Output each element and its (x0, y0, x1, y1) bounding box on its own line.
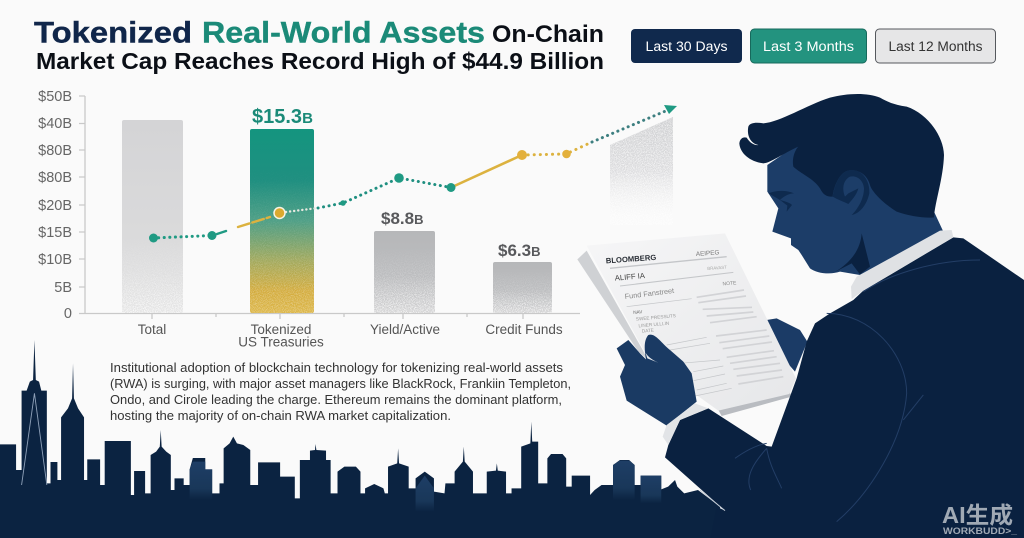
button: Last 30 Days: Last 30 Days (646, 39, 728, 54)
neck shadow (832, 233, 870, 274)
title: Market Cap Reaches Record High of $44.9 Billion (36, 48, 604, 74)
category labels: Credit Funds (485, 322, 563, 337)
document (577, 233, 796, 416)
button: Last 3 Months: Last 3 Months (763, 39, 854, 54)
value label: $8.8B: $8.8B (381, 209, 423, 228)
document text: AEIPEG (696, 249, 720, 258)
y axis labels: $50B (38, 89, 72, 105)
body, hands and document (577, 233, 1024, 538)
watermark: AI生成 (942, 502, 1013, 528)
bar: Tokenized US Treasuries (250, 129, 314, 313)
y axis (38, 89, 85, 322)
document text: NOTE (722, 280, 737, 287)
document text (606, 249, 737, 334)
shirt collar (851, 230, 953, 299)
bar: Credit Funds (493, 262, 552, 313)
y axis labels: $40B (38, 116, 72, 132)
hair (739, 94, 944, 218)
y axis labels: $20B (38, 198, 72, 214)
head (739, 94, 944, 275)
description text: (RWA) is surging, with major asset managers like BlackRock, Frankiin Templeton, (110, 376, 571, 391)
hand behind document (747, 318, 807, 372)
bar: Yield/Active (374, 231, 435, 313)
category labels: Yield/Active (370, 322, 440, 337)
person reading document (577, 94, 1024, 538)
markers (149, 150, 571, 242)
title: On-Chain (492, 21, 604, 48)
watermark (942, 502, 1018, 536)
y axis labels: 5B (54, 280, 72, 296)
jacket (665, 237, 1024, 538)
y axis labels (38, 89, 72, 322)
hand holding document (617, 335, 697, 426)
document rule lines (610, 257, 783, 396)
y axis labels: $80B (38, 143, 72, 159)
title: Real-World Assets (202, 16, 485, 50)
jacket seams (700, 260, 980, 522)
trend line with markers (149, 105, 677, 242)
category labels: Total (138, 322, 166, 337)
document text: ALIFF IA (614, 271, 646, 283)
title (34, 16, 604, 74)
arrowhead (664, 105, 677, 114)
button: Last 12 Months (876, 29, 996, 63)
lighter buildings (190, 461, 661, 512)
button: Last 3 Months (750, 29, 866, 63)
x axis (79, 313, 580, 319)
description text: hosting the majority of on-chain RWA market capitalization. (110, 408, 451, 423)
description text: Institutional adoption of blockchain technology for tokenizing real-world assets (110, 360, 563, 375)
description text: Ondo, and Cirole leading the charge. Ethereum remains the dominant platform, (110, 392, 562, 407)
value label: $15.3B: $15.3B (252, 106, 313, 128)
city skyline (0, 340, 720, 538)
ear (833, 170, 869, 215)
y axis labels: 0 (64, 306, 72, 322)
thumb curl of paper (644, 348, 660, 363)
document text: SWEE PRESSUTS (636, 313, 676, 322)
y axis labels: $10B (38, 252, 72, 268)
description text (110, 360, 571, 423)
document text: Fund Fanstreet (624, 286, 675, 301)
face and neck (767, 145, 943, 275)
document text: NAV (633, 309, 644, 315)
category labels (138, 322, 563, 350)
y axis labels: $80B (38, 170, 72, 186)
bar: Total (122, 120, 183, 313)
bar: faded projection (610, 117, 673, 225)
eye and brow (768, 191, 794, 212)
value label: $6.3B: $6.3B (498, 241, 540, 260)
category labels: US Treasuries (238, 334, 324, 350)
document text: DATE (642, 328, 654, 334)
document text: LINER ULLLIN (638, 321, 669, 328)
watermark: WORKBUDD>_ (943, 526, 1018, 536)
document text: BRAVAST (707, 265, 727, 271)
button: Last 30 Days (631, 29, 742, 63)
shirt cuff (663, 403, 708, 445)
category labels: Tokenized (251, 322, 311, 337)
button: Last 12 Months: Last 12 Months (888, 39, 983, 54)
document text: BLOOMBERG (606, 253, 657, 265)
title: Tokenized (34, 16, 192, 50)
spire lines (22, 393, 47, 485)
y axis labels: $15B (38, 225, 72, 241)
